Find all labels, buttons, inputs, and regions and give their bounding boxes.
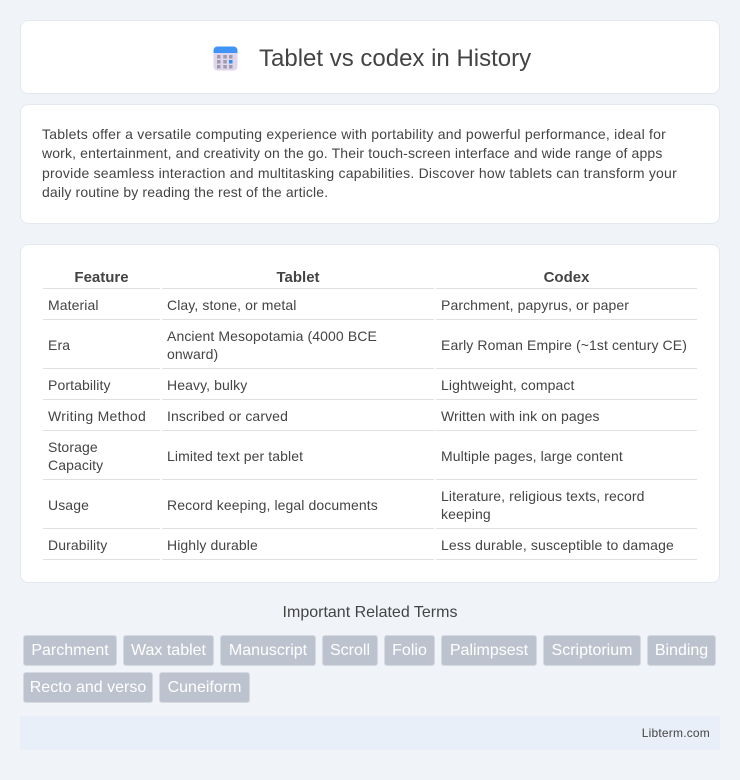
intro paragraph: daily routine by reading the rest of the article.	[42, 184, 328, 200]
table: Heavy, bulky	[167, 377, 247, 393]
intro paragraph: provide seamless interaction and multitasking capabilities. Discover how tablets can transform your	[42, 165, 677, 181]
tag	[384, 635, 435, 666]
table: Record keeping, legal documents	[167, 497, 378, 513]
table: Clay, stone, or metal	[167, 297, 296, 313]
table: Multiple pages, large content	[441, 448, 623, 464]
intro paragraph: work, entertainment, and creativity on the go. Their touch-screen interface and wide range of apps	[42, 145, 662, 161]
tag: Palimpsest	[450, 642, 528, 659]
footer bar	[20, 716, 720, 750]
title: Tablet vs codex in History	[259, 45, 531, 72]
tag: Manuscript	[229, 642, 307, 659]
intro paragraph	[42, 126, 677, 200]
row: storage capacity	[48, 439, 104, 473]
tag: Binding	[655, 642, 708, 659]
tag	[159, 672, 250, 703]
row: era: Era	[48, 337, 70, 353]
comparison table panel	[20, 244, 720, 583]
table: Parchment, papyrus, or paper	[441, 297, 629, 313]
intro paragraph: Tablets offer a versatile computing experience with portability and powerful performance, ideal for	[42, 126, 666, 142]
table	[43, 269, 697, 560]
column headings: Codex	[544, 269, 589, 286]
tag: Scroll	[330, 642, 370, 659]
row: durability: Durability	[48, 537, 107, 553]
tag	[543, 635, 641, 666]
table: onward)	[167, 346, 218, 362]
table: Limited text per tablet	[167, 448, 303, 464]
row: portability: Portability	[48, 377, 111, 393]
row: material: Material	[48, 297, 99, 313]
tag: Cuneiform	[168, 679, 241, 696]
table: Early Roman Empire (~1st century CE)	[441, 337, 687, 353]
intro text panel	[20, 104, 720, 224]
tag	[647, 635, 716, 666]
row: writing method: Writing Method	[48, 408, 146, 424]
tag	[220, 635, 316, 666]
related term tags	[23, 635, 716, 703]
column headings	[74, 269, 590, 286]
tag	[23, 635, 117, 666]
table: keeping	[441, 506, 491, 522]
table: Ancient Mesopotamia (4000 BCE	[167, 328, 377, 344]
tag	[123, 635, 214, 666]
tag	[441, 635, 537, 666]
column headings: Feature	[74, 269, 129, 286]
row: usage: Usage	[48, 497, 89, 513]
icon: calendar tablet	[214, 46, 238, 70]
tag: Scriptorium	[552, 642, 632, 659]
tag: Parchment	[31, 642, 109, 659]
column headings: Tablet	[276, 269, 320, 286]
footer credit: Libterm.com	[642, 726, 710, 740]
tag: Recto and verso	[30, 679, 146, 696]
table: Less durable, susceptible to damage	[441, 537, 674, 553]
table: Highly durable	[167, 537, 258, 553]
tag	[322, 635, 378, 666]
table: Inscribed or carved	[167, 408, 288, 424]
table: Literature, religious texts, record	[441, 488, 644, 504]
tag	[23, 672, 153, 703]
related terms heading: Important Related Terms	[283, 604, 457, 621]
row: storage capacity: Storage	[48, 439, 98, 455]
table: Lightweight, compact	[441, 377, 575, 393]
row: storage capacity: Capacity	[48, 457, 103, 473]
header card	[20, 20, 720, 94]
tag: Folio	[392, 642, 427, 659]
table: Written with ink on pages	[441, 408, 600, 424]
tag: Wax tablet	[131, 642, 206, 659]
